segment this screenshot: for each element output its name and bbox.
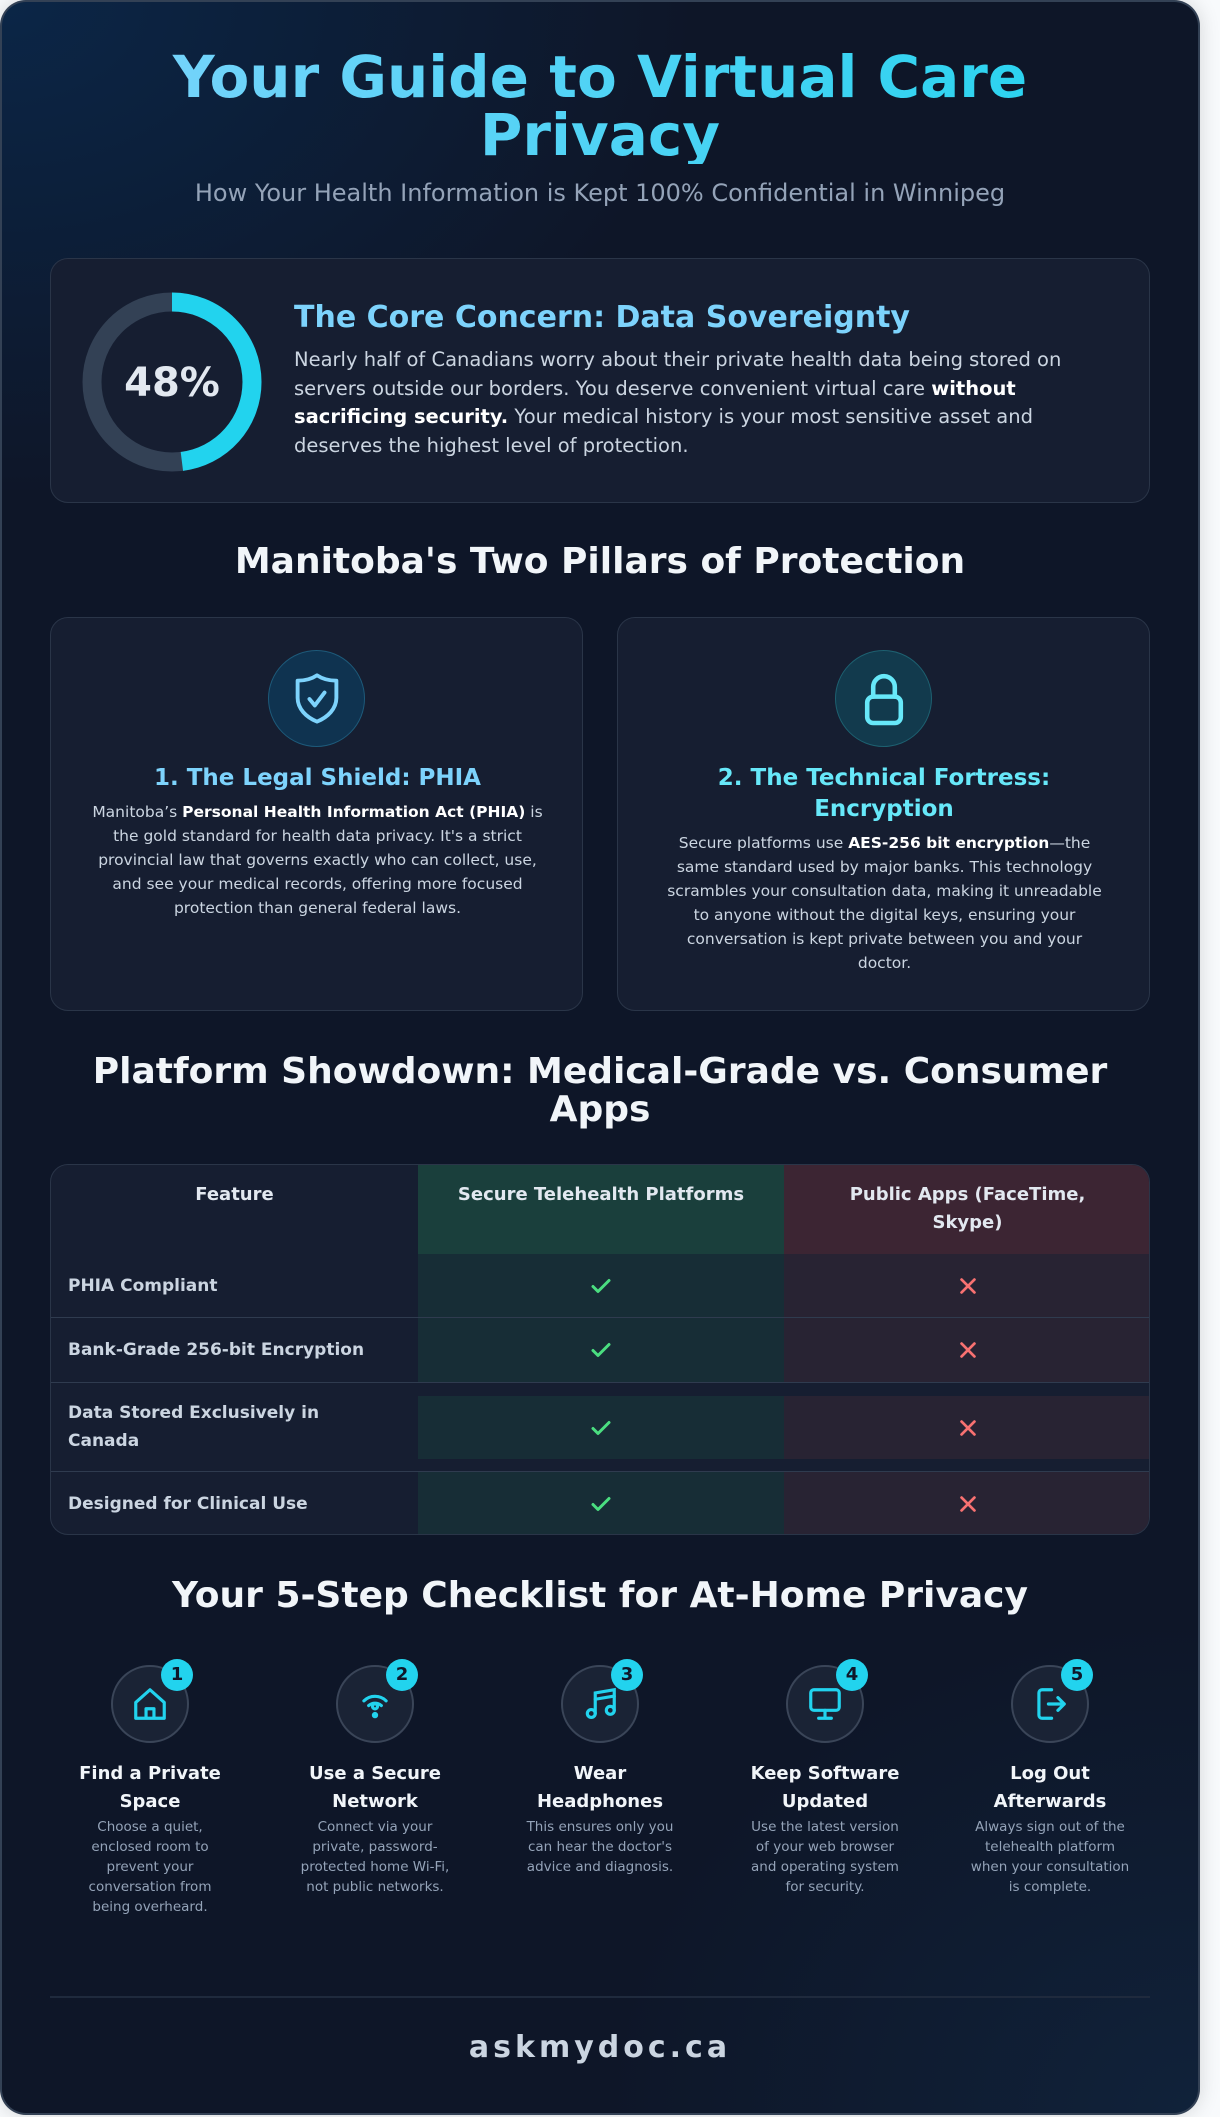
heading: platform showdown: Platform Showdown: Medical-Grade vs. Consumer Apps: [93, 1051, 1107, 1130]
panel: core concern: [50, 258, 1150, 503]
icon: music note: [561, 1665, 639, 1743]
body: Manitoba’s Personal Health Information Act (PHIA) is the gold standard for health data privacy. It's a strict provincial law that governs exactly who can collect, use, and see your medical records, offering more focused protection than general federal laws.: [92, 803, 543, 917]
column backgrounds: [418, 1165, 784, 1254]
step 3: [526, 1659, 673, 1875]
row 4: Designed for Clinical Use: [68, 1494, 308, 1514]
main card: Wear Headphones: [537, 1763, 663, 1812]
body: Secure platforms use AES-256 bit encryption—the same standard used by major banks. This technology scrambles your consultation data, making it unreadable to anyone without the digital keys, ensuring your conversation is kept private between you and your doctor.: [667, 834, 1102, 972]
main card: 2: [396, 1664, 408, 1685]
row 2: Bank-Grade 256-bit Encryption: [68, 1340, 364, 1360]
comparison table: [50, 1164, 1150, 1535]
icon: lock: [835, 650, 932, 747]
row 1: PHIA Compliant: [68, 1276, 217, 1296]
icon: wifi: [336, 1665, 414, 1743]
icon: house: [111, 1665, 189, 1743]
header: public: Public Apps (FaceTime, Skype): [850, 1184, 1085, 1233]
subtitle: How Your Health Information is Kept 100% Confidential in Winnipeg: [195, 179, 1005, 207]
main card: Connect via your private, password-protected home Wi-Fi, not public networks.: [301, 1819, 449, 1895]
main card: 5: [1071, 1664, 1083, 1685]
main card: Keep Software Updated: [751, 1763, 899, 1812]
row 3: Data Stored Exclusively in Canada: [68, 1402, 319, 1450]
title: 1. The Legal Shield: PHIA: [154, 765, 481, 791]
main card: Use a Secure Network: [309, 1763, 441, 1812]
body text: Nearly half of Canadians worry about their private health data being stored on servers outside our borders. You deserve convenient virtual care without sacrificing security. Your medical history is your most sensitive asset and deserves the highest level of protection.: [294, 348, 1061, 456]
step 5: [971, 1659, 1129, 1895]
title: 2. The Technical Fortress: Encryption: [718, 765, 1050, 822]
heading: The Core Concern: Data Sovereignty: [294, 300, 910, 335]
panel: legal shield: [50, 617, 583, 1011]
icon: log out: [1011, 1665, 1089, 1743]
header: secure: Secure Telehealth Platforms: [458, 1184, 744, 1205]
main card: Choose a quiet, enclosed room to prevent your conversation from being overheard.: [89, 1819, 211, 1915]
heading: checklist: Your 5-Step Checklist for At-Home Privacy: [172, 1575, 1028, 1616]
main card: 3: [621, 1664, 633, 1685]
heading: two pillars: Manitoba's Two Pillars of Protection: [235, 541, 965, 582]
main card: 1: [171, 1664, 183, 1685]
main card: 4: [846, 1664, 858, 1685]
main card: This ensures only you can hear the doctor's advice and diagnosis.: [527, 1819, 673, 1875]
panel: encryption: [617, 617, 1150, 1011]
footer brand: askmydoc.ca: [469, 2030, 731, 2065]
icon: shield: [268, 650, 365, 747]
title: Your Guide to Virtual Care Privacy: [173, 43, 1027, 169]
header: feature: Feature: [195, 1184, 274, 1205]
main card: Log Out Afterwards: [994, 1763, 1106, 1812]
donut chart 48%: [82, 292, 262, 472]
main card: Find a Private Space: [79, 1763, 221, 1812]
main card: Use the latest version of your web browser and operating system for security.: [751, 1819, 899, 1895]
main card: Always sign out of the telehealth platform when your consultation is complete.: [971, 1819, 1129, 1895]
step 2: [301, 1659, 449, 1895]
icon: monitor: [786, 1665, 864, 1743]
step 1: [79, 1659, 221, 1915]
donut chart 48%: 48%: [124, 360, 220, 406]
step 4: [751, 1659, 899, 1895]
